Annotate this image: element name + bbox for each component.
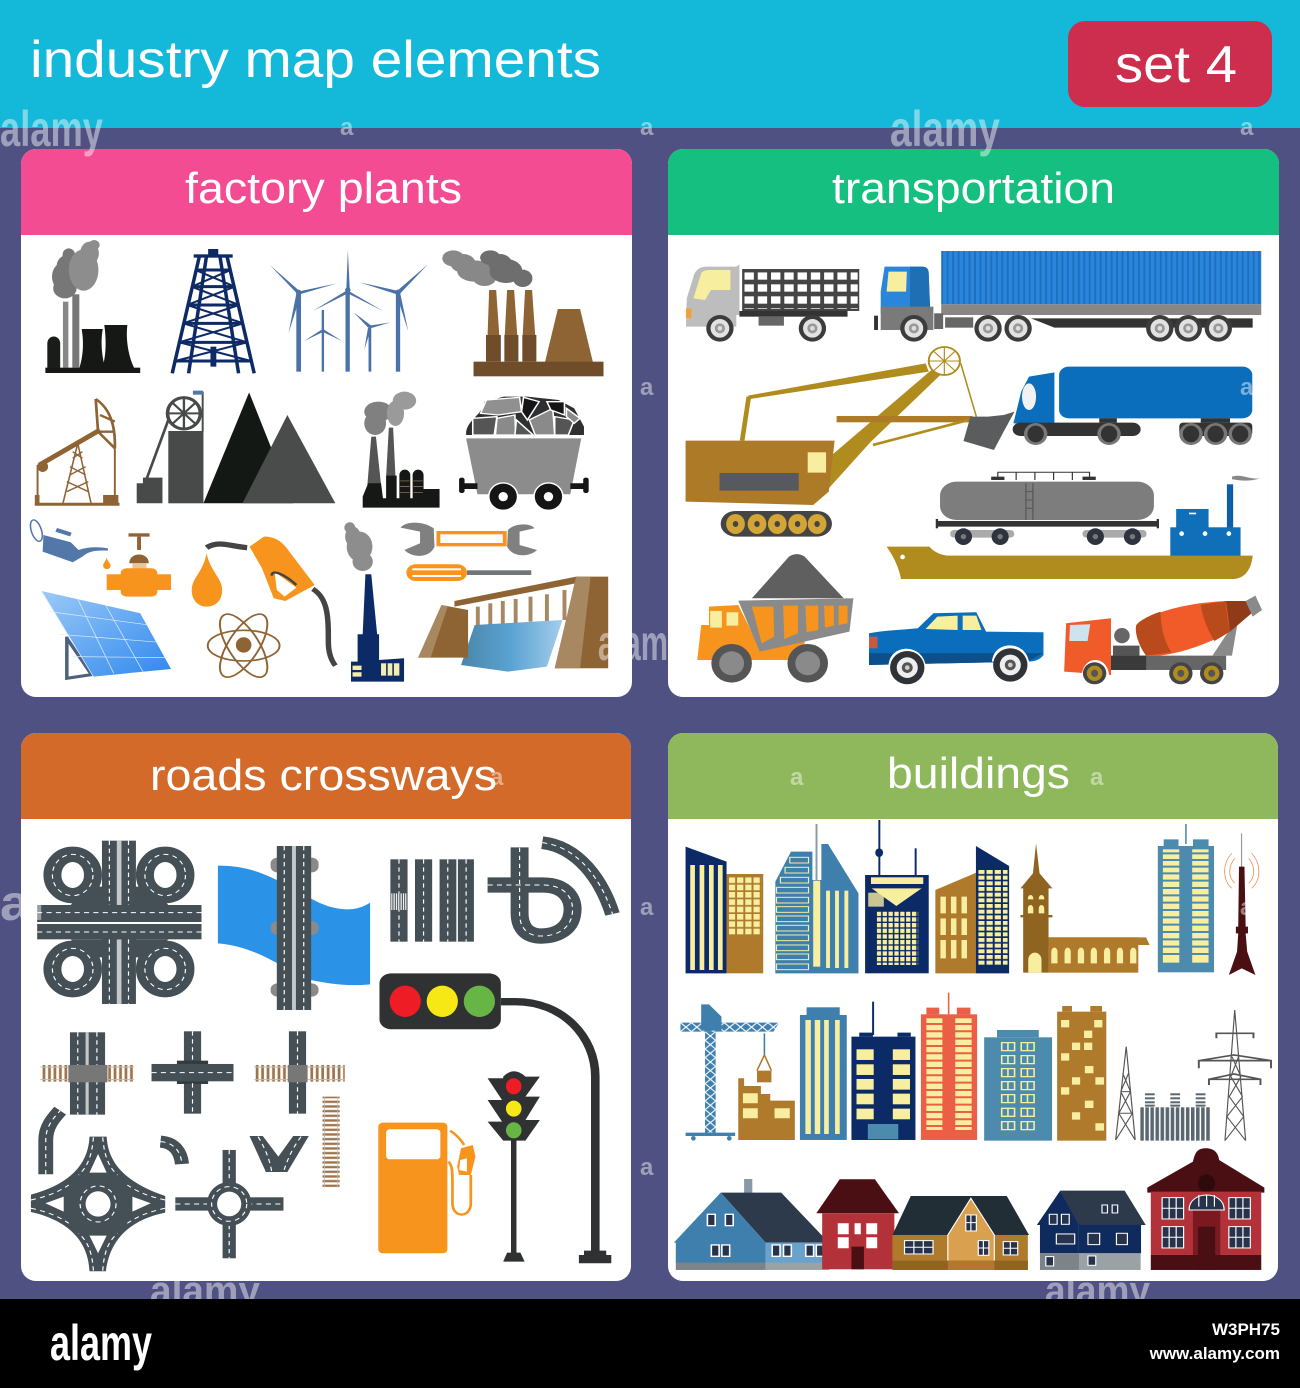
watermark marks: a [1090,764,1104,791]
icon: rail crossing narrow [254,1031,345,1114]
icon: lattice mast [1116,1047,1135,1140]
icon: solar panel [41,591,171,678]
icon: railway track [322,1097,340,1187]
watermark marks: a [490,764,504,791]
title: industry map elements [30,31,601,89]
icon: pickup truck [869,612,1043,684]
watermark marks: a [1240,894,1254,921]
icon: navy house [1037,1191,1146,1270]
icon: curved road pieces [488,843,612,936]
icon: brown block [1057,1006,1106,1141]
watermark marks: a [1240,1154,1254,1181]
icon: small factory [363,392,440,508]
heading: transportation: transportation [832,164,1115,213]
icon: blue glass towers [775,824,858,973]
watermark marks: alam [598,615,668,671]
icon: substation [1140,1093,1210,1141]
icon: hydro dam [418,577,608,672]
icon: teal block [984,1030,1052,1141]
icon: fuel pump [378,1123,475,1253]
icon: container lorry [874,251,1261,342]
heading: roads crossways: roads crossways [150,751,497,800]
footer bar [0,1299,1300,1388]
watermark marks: a [340,114,354,141]
icon: power pylon [1199,1010,1271,1141]
icon: small traffic light [488,1071,540,1262]
watermark marks: a [790,764,804,791]
website: www.alamy.com [1149,1344,1280,1363]
icon: mining excavator [686,347,1015,537]
icon: blue skyscraper [800,1007,847,1140]
icon: cloverleaf interchange [37,841,201,1004]
watermark marks: alamy [890,101,1000,157]
icon: screwdriver [406,564,531,581]
watermark marks: a [1240,374,1254,401]
icon: fuel drop [192,553,222,607]
icon: mine and spoil heaps [137,391,335,503]
icon: power plant [45,240,140,373]
icon: flatbed grey truck [686,264,859,342]
icon: wind turbines [270,250,428,372]
icon: navy and brown towers [686,847,763,973]
icon: cargo ship [887,476,1260,579]
watermark marks: alamy [150,1269,261,1313]
factory plants icons [28,240,608,683]
icon: large roundabout [31,1137,165,1271]
heading: factory plants: factory plants [185,164,462,213]
watermark marks: alamy [1045,1269,1151,1313]
icon: dump truck [697,554,853,683]
icon: road corner [161,1142,182,1164]
icon: oil can [28,519,111,569]
icon: navy chimney [344,522,404,682]
icon: large traffic light [379,973,611,1263]
badge: set 4: set 4 [1115,36,1237,94]
watermark marks: a [640,894,654,921]
panel: buildings [668,733,1278,1281]
badge: set 4 [1068,21,1272,107]
icon: valve [107,533,171,597]
transportation icons [686,251,1262,684]
icon: brown factory [442,250,603,376]
buildings icons [674,820,1271,1270]
icon: radio tower [1225,833,1259,975]
icon: large red villa [1147,1148,1264,1270]
icon: cement mixer [1064,596,1262,684]
panel: factory plants [21,149,632,697]
icon: road junction [152,1031,233,1114]
icon: road fork [249,1136,309,1172]
icon: teal tall block [1158,824,1214,972]
icon: brown and navy tower [935,846,1009,973]
icon: coal cart [459,397,589,510]
icon: building under construction [738,1078,795,1140]
icon: tan house [892,1196,1029,1270]
icon: oil derrick [172,249,254,373]
icon: oil pump jack [35,399,120,505]
icon: road bridge over river [218,846,370,1010]
watermark marks: a [1240,114,1254,141]
icon: straight road pieces [390,859,474,942]
roads icons [31,841,612,1271]
heading: buildings: buildings [887,749,1070,798]
watermark marks: a [640,114,654,141]
icon: tower crane [680,1004,779,1141]
watermark marks: alamy [0,101,103,157]
icon: navy office block [851,1002,915,1140]
watermark marks: al [0,875,45,931]
icon: rail crossing wide [40,1032,134,1115]
icon: wrench [401,523,537,556]
icon: blue house [674,1179,829,1270]
icon: small roundabout [175,1150,283,1258]
footer logo: alamy [50,1315,152,1371]
icon: navy spire tower [865,820,929,973]
icon: rail tank wagon [936,472,1159,545]
panel: roads crossways [21,733,631,1281]
watermark marks: a [640,1154,654,1181]
panel: transportation [668,149,1279,697]
icon: curved road short [46,1111,60,1174]
icon: fuel nozzle [207,537,335,666]
icon: atom [208,608,280,683]
icon: blue fuel tanker [1013,367,1252,445]
image id: W3PH75 [1212,1320,1280,1339]
icon: church [1020,843,1150,973]
header band [0,0,1300,128]
watermark marks: a [640,374,654,401]
icon: red house [816,1179,899,1269]
icon: coral block [921,993,977,1140]
